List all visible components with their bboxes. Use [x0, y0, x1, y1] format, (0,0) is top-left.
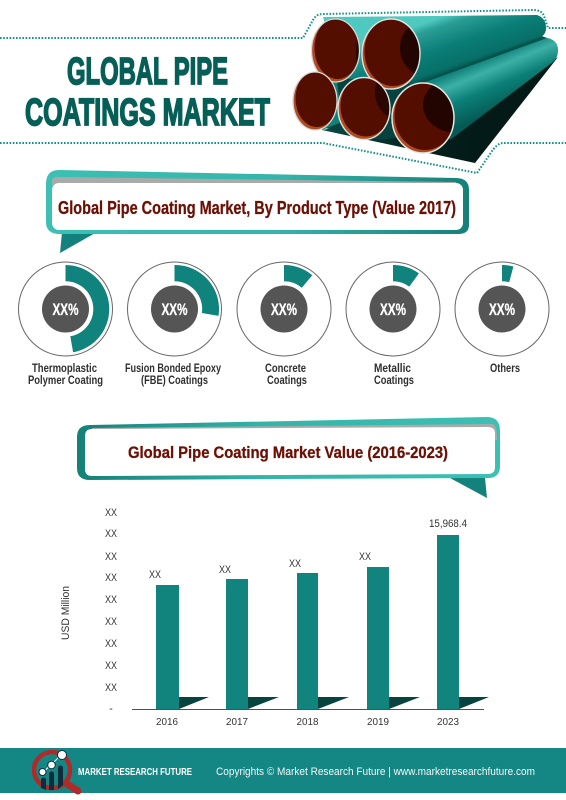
- callout heading text: Global Pipe Coating Market, By Product Type (Value 2017): [58, 198, 456, 218]
- y axis tick labels: [105, 507, 118, 715]
- x axis year labels: 2017: [226, 716, 248, 728]
- seam between upper and lower pipes: [405, 34, 550, 86]
- callout heading text: Global Pipe Coating Market Value (2016-2023): [128, 443, 448, 462]
- callout tail: [450, 478, 487, 498]
- y axis tick labels: XX: [105, 528, 118, 540]
- y axis tick labels: -: [109, 703, 113, 715]
- donut category labels: Polymer Coating: [28, 373, 103, 387]
- donut: thermoplastic polymer coating: [18, 262, 112, 356]
- donut category labels: Coatings: [267, 373, 307, 387]
- donut category labels: [28, 361, 520, 387]
- donut category labels: Thermoplastic: [32, 361, 97, 375]
- donut: fusion bonded epoxy: XX%: [162, 300, 188, 319]
- donut: metallic coatings: XX%: [380, 300, 406, 319]
- bar value labels: XX: [359, 551, 372, 563]
- bar shadows: [179, 697, 489, 709]
- pipe stack illustration: [293, 15, 558, 163]
- donut category labels: (FBE) Coatings: [141, 373, 208, 387]
- callout tail: [60, 232, 97, 253]
- lower right pipe body: [423, 38, 558, 140]
- donut category labels: Fusion Bonded Epoxy: [125, 361, 221, 375]
- bar value labels: 15,968.4: [429, 518, 467, 530]
- pipe opening: top right: [362, 20, 420, 88]
- x axis year labels: 2018: [296, 716, 319, 728]
- bar value labels: XX: [219, 564, 232, 576]
- y axis title: USD Million: [60, 586, 72, 640]
- header dotted frame lines: [0, 10, 566, 173]
- x axis year labels: 2019: [367, 716, 389, 728]
- lower left pipe body: [312, 72, 342, 130]
- x axis year labels: [156, 716, 459, 728]
- donut category labels: Others: [490, 361, 520, 375]
- x axis year labels: 2023: [437, 716, 459, 728]
- upper pipes body: [323, 15, 546, 84]
- footer copyright: Copyrights © Market Research Future | www.marketresearchfuture.com: [216, 766, 535, 778]
- y axis tick labels: XX: [105, 572, 118, 584]
- callout: product type heading: [46, 170, 469, 253]
- callout grey shadow: [92, 424, 497, 440]
- donut: concrete coatings: [237, 262, 331, 356]
- donut charts: [18, 262, 549, 356]
- pipe opening: bottom right: [392, 84, 454, 152]
- pipe opening: bottom left: [294, 72, 336, 130]
- callout: market value heading: [77, 417, 500, 498]
- bar chart: market value: [60, 507, 489, 728]
- bar value labels: XX: [149, 569, 162, 581]
- footer band: [0, 748, 566, 793]
- donut category labels: Concrete: [265, 361, 306, 375]
- donut: metallic coatings: [346, 262, 440, 356]
- donut category labels: Metallic: [374, 361, 411, 375]
- title: GLOBAL PIPE: [67, 51, 228, 93]
- donut: thermoplastic polymer coating: XX%: [52, 300, 78, 319]
- callout frame: [77, 417, 500, 480]
- y axis tick labels: XX: [105, 507, 118, 519]
- callout inner panel: [85, 427, 495, 476]
- callout frame: [46, 170, 469, 234]
- donut: fusion bonded epoxy: [128, 262, 222, 356]
- y axis tick labels: XX: [105, 594, 118, 606]
- donut category labels: Coatings: [374, 373, 414, 387]
- bar value labels: [149, 518, 467, 581]
- y axis tick labels: XX: [105, 616, 118, 628]
- y axis tick labels: XX: [105, 551, 118, 563]
- pipe opening: bottom middle: [338, 78, 390, 139]
- y axis tick labels: XX: [105, 638, 118, 650]
- donut: others: XX%: [489, 300, 515, 319]
- bars: [156, 535, 459, 709]
- callout inner panel: [52, 183, 463, 230]
- title: [25, 51, 270, 134]
- y axis tick labels: XX: [105, 660, 118, 672]
- x axis year labels: 2016: [156, 716, 178, 728]
- callout grey shadow: [52, 177, 456, 186]
- gap behind pipes: [322, 70, 452, 140]
- bar value labels: XX: [289, 558, 302, 570]
- x axis line: [132, 709, 484, 710]
- footer brand name: MARKET RESEARCH FUTURE: [78, 767, 192, 778]
- donut: others: [455, 262, 549, 356]
- icon: market research future logo: [34, 750, 78, 791]
- title: COATINGS MARKET: [25, 92, 270, 134]
- donut: concrete coatings: XX%: [271, 300, 297, 319]
- pipes ground shadow: [322, 57, 558, 163]
- pipe opening: top left: [312, 20, 359, 82]
- y axis tick labels: XX: [105, 682, 118, 694]
